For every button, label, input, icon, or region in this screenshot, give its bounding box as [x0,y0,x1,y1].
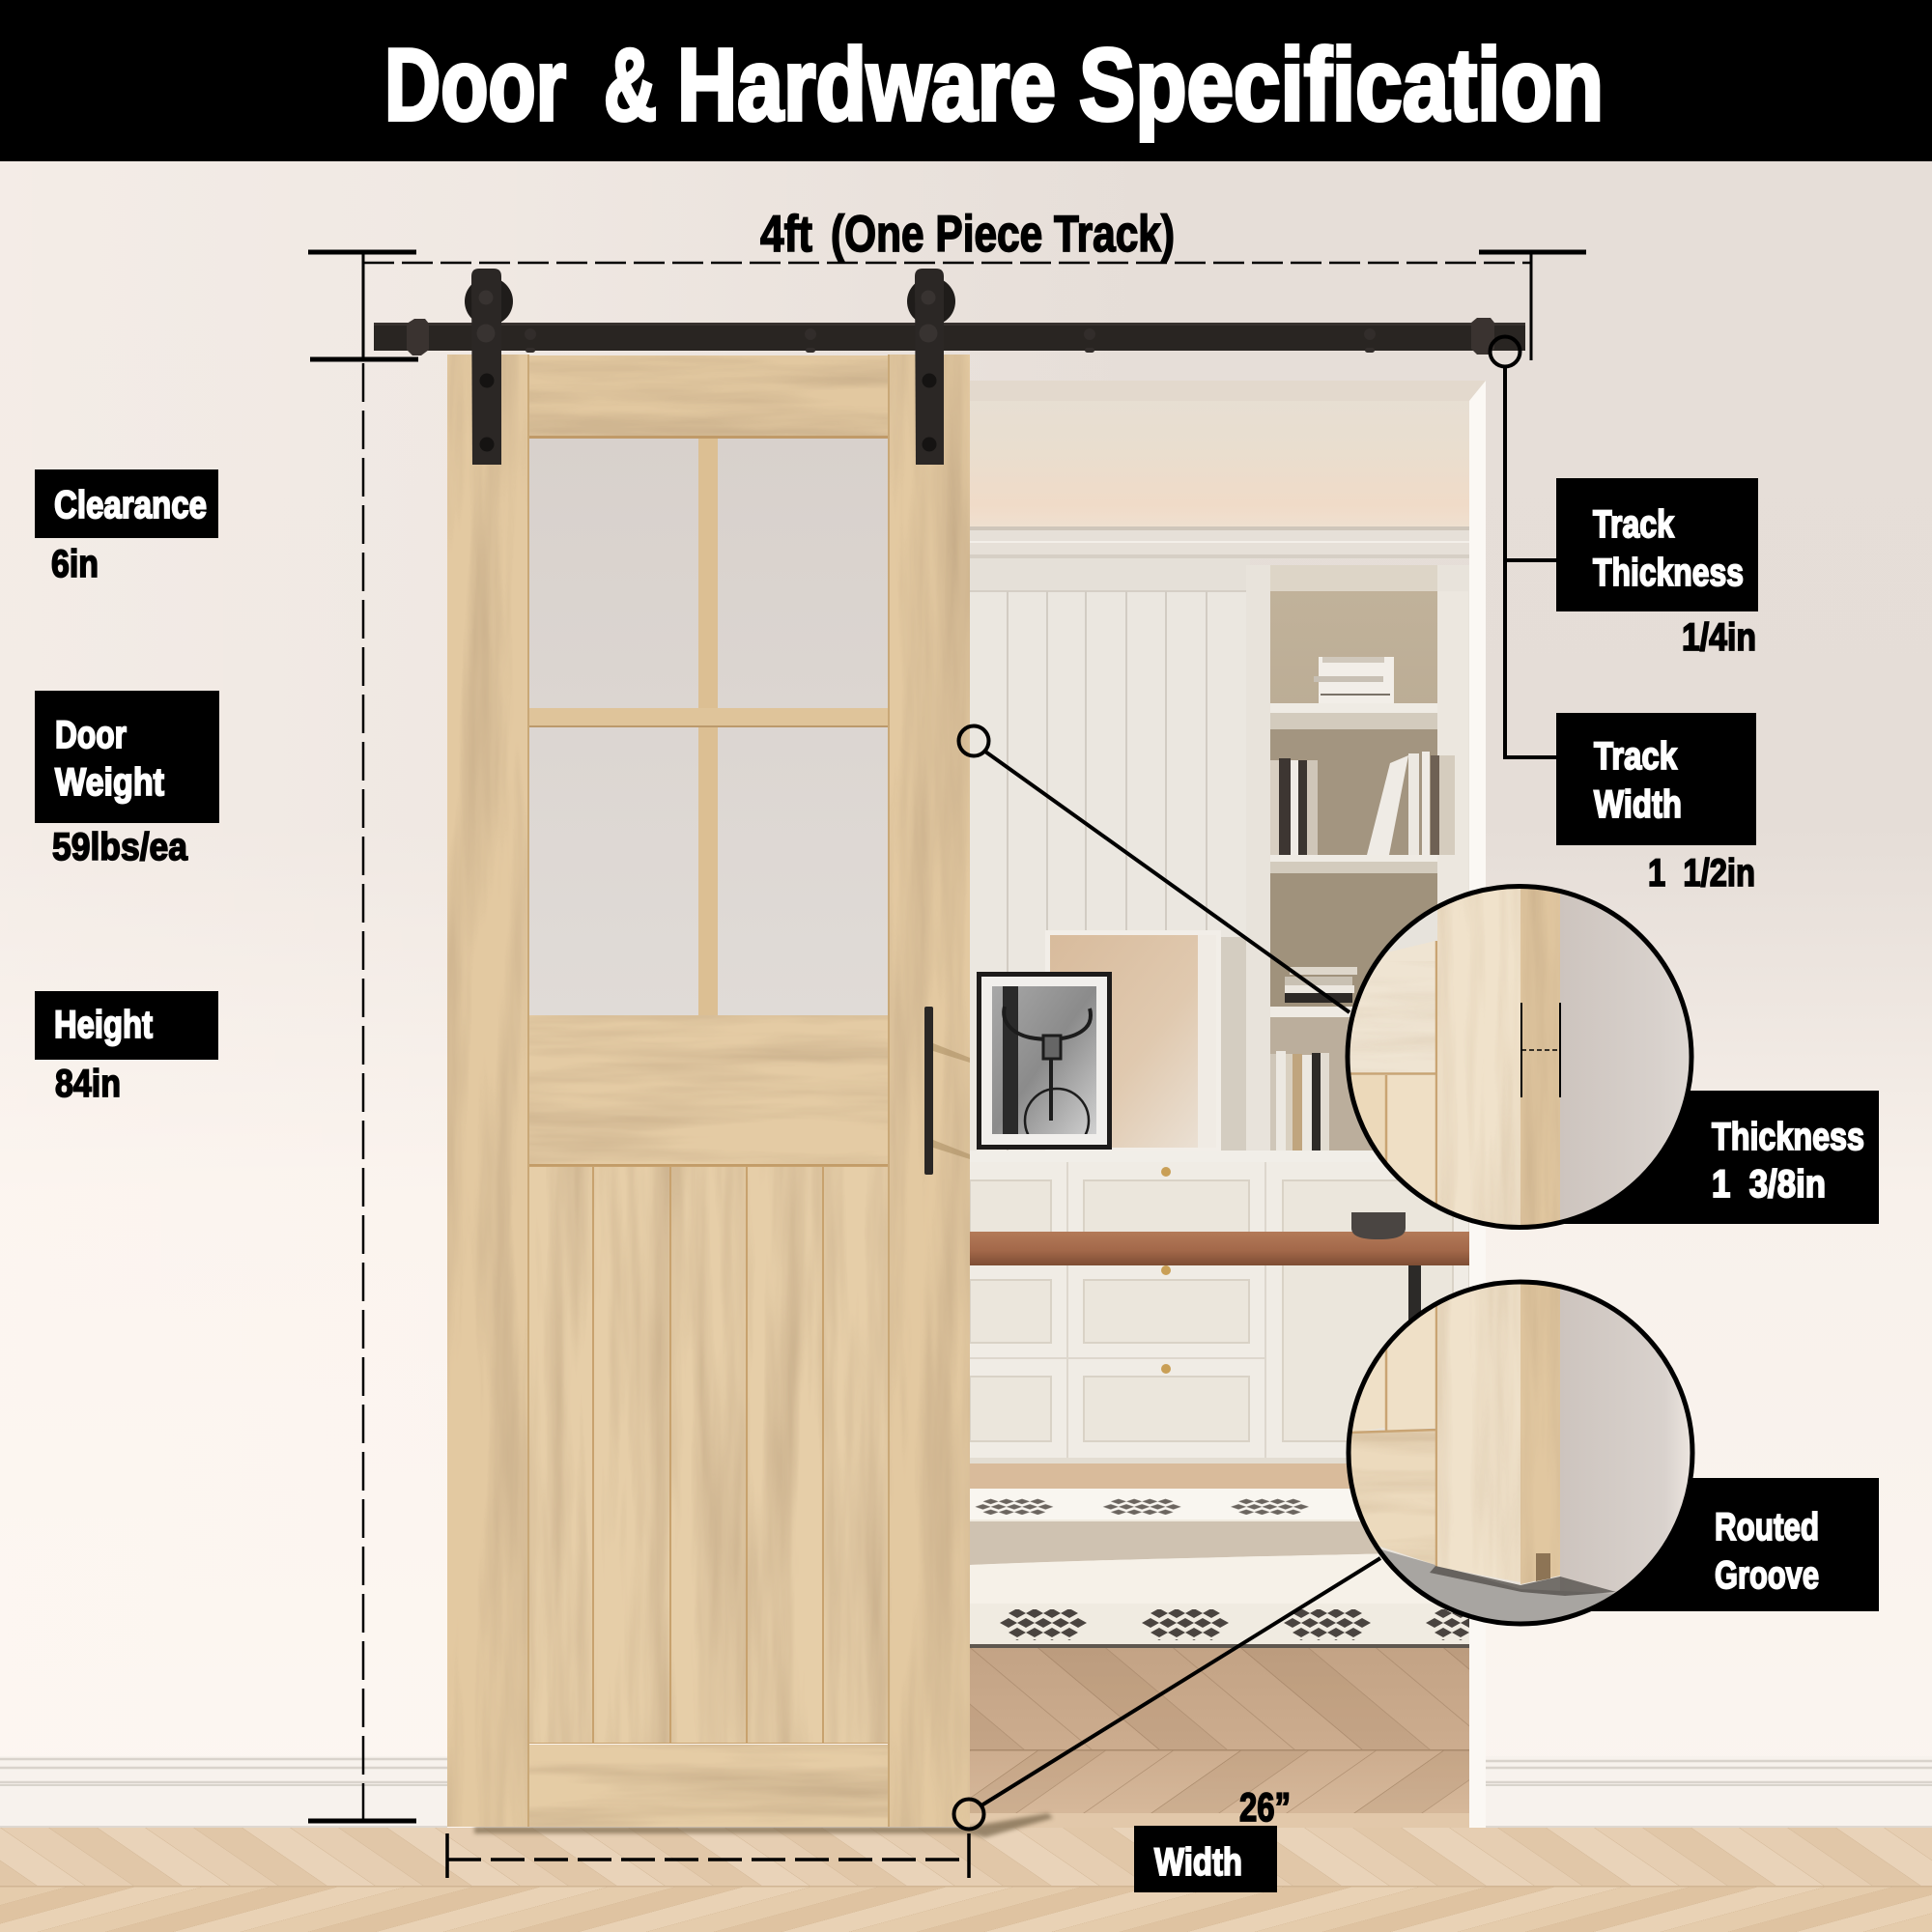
label: thickness: 1 3/8in [1712,1163,1826,1206]
label: track thickness [1556,478,1758,659]
label: clearance: 6in [51,543,99,585]
title: & [604,28,657,142]
label: track width: Width [1594,783,1682,826]
label: height: Height [54,1004,153,1046]
glass panes [528,439,889,1015]
label: width [1134,1784,1291,1892]
label: routed groove: Groove [1715,1554,1819,1597]
baseboard [0,1756,1932,1828]
title [384,28,1604,142]
framed art: bicycle photo [977,972,1112,1152]
label: track thickness: Thickness [1593,552,1744,594]
framed art: abstract canvas [1045,930,1246,1151]
barn door [447,355,970,1827]
door handle [924,1007,970,1175]
bottom rail [528,1745,889,1827]
beadboard wall [970,558,1250,1161]
title: Door [384,28,566,142]
track length label: (One Piece Track) [831,206,1175,263]
magnifier: door thickness detail [1343,879,1700,1239]
door width dimension [447,1833,969,1878]
routed groove leader [954,1558,1380,1830]
door frame stiles [447,355,970,1827]
label: track thickness: Track [1593,503,1675,546]
label: door weight: Weight [55,761,164,804]
hanger strap left [465,269,513,465]
door opening right trim [1469,381,1486,1828]
hanger strap right [907,269,955,465]
top rail [528,355,889,439]
ceiling and casing [970,381,1486,527]
title: Hardware [677,28,1056,142]
track length label [760,206,1175,263]
books [1270,657,1455,1151]
label: clearance [35,469,218,585]
label: width: 26” [1239,1784,1291,1830]
floor [0,1828,1932,1932]
label: door weight [35,691,219,868]
label: thickness: Thickness [1712,1116,1864,1158]
label: track thickness: 1/4in [1682,616,1756,659]
label: track width: 1 1/2in [1648,852,1755,895]
room floor and rug [970,1458,1469,1828]
clearance and height dimension [308,252,418,1821]
track stoppers [407,318,1494,355]
label: routed groove: Routed [1715,1506,1819,1548]
label: clearance: Clearance [54,484,207,526]
track length dimension [308,252,1586,360]
label: height: 84in [55,1063,121,1105]
V-groove planks [528,1166,889,1744]
label: routed groove [1546,1478,1879,1611]
crown moulding [970,526,1469,559]
label: door weight: Door [55,714,127,756]
track length label: 4ft [760,206,812,263]
thickness marks [1521,1003,1560,1097]
label: track width: Track [1594,735,1678,778]
glass muntins [528,439,889,1015]
label: door weight: 59lbs/ea [52,826,188,868]
magnifier: routed groove detail [1343,1275,1700,1633]
track lag bolts [525,328,1376,353]
room seen through the opening [970,381,1486,1828]
cabinets [970,1151,1469,1463]
desk [970,1232,1469,1343]
lock rail [528,1015,889,1166]
door shadow [474,1813,1053,1837]
label: track width [1556,713,1756,895]
thickness leader [958,726,1350,1012]
title: Specification [1079,28,1604,142]
label: width: Width [1154,1841,1242,1884]
mug on desk [1351,1212,1406,1239]
label: height [35,991,218,1105]
track detail leader [1490,336,1556,757]
bookcase [1246,565,1469,1159]
label: thickness [1546,1091,1879,1224]
sliding track [374,318,1525,355]
header band [0,0,1932,161]
